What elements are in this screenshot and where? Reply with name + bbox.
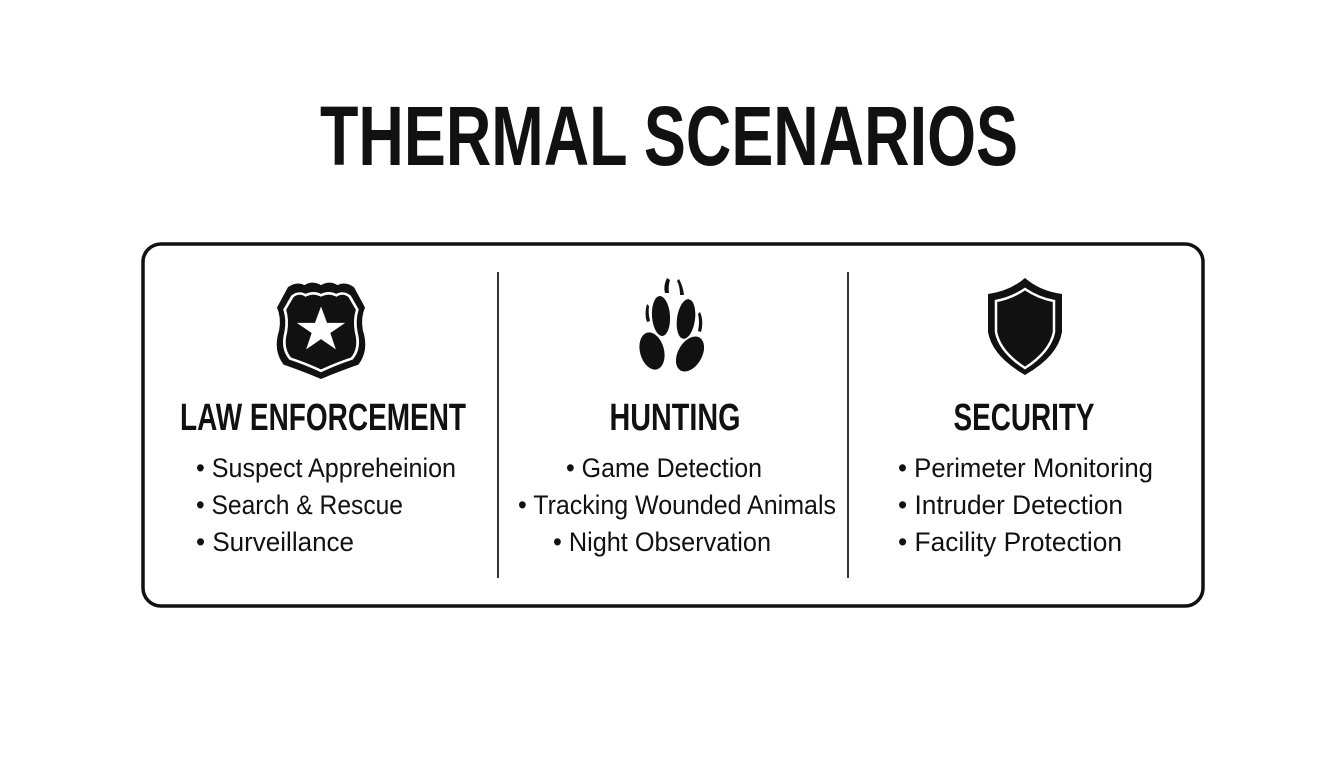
list: security bbox=[898, 453, 1153, 557]
list: law enforcement: • Suspect Appreheinion bbox=[196, 453, 456, 483]
heading: law enforcement: LAW ENFORCEMENT bbox=[180, 397, 466, 439]
icon: shield bbox=[988, 278, 1062, 375]
list: security: • Facility Protection bbox=[898, 527, 1122, 557]
list: law enforcement bbox=[196, 453, 456, 557]
list: hunting: • Night Observation bbox=[553, 527, 771, 557]
list: security: • Intruder Detection bbox=[898, 490, 1123, 520]
heading: security: SECURITY bbox=[954, 397, 1094, 439]
icon: paw print bbox=[635, 278, 710, 376]
column: law enforcement bbox=[180, 283, 466, 557]
list: law enforcement: • Search & Rescue bbox=[196, 490, 403, 520]
heading: hunting: HUNTING bbox=[610, 397, 740, 439]
column: hunting bbox=[518, 278, 836, 557]
icon: police badge bbox=[277, 283, 365, 379]
column: security bbox=[898, 278, 1153, 557]
list: hunting bbox=[518, 453, 836, 557]
list: hunting: • Tracking Wounded Animals bbox=[518, 490, 836, 520]
panel: scenarios box bbox=[143, 244, 1203, 606]
list: law enforcement: • Surveillance bbox=[196, 527, 354, 557]
list: security: • Perimeter Monitoring bbox=[898, 453, 1153, 483]
list: hunting: • Game Detection bbox=[566, 453, 762, 483]
title: THERMAL SCENARIOS bbox=[320, 89, 1018, 183]
